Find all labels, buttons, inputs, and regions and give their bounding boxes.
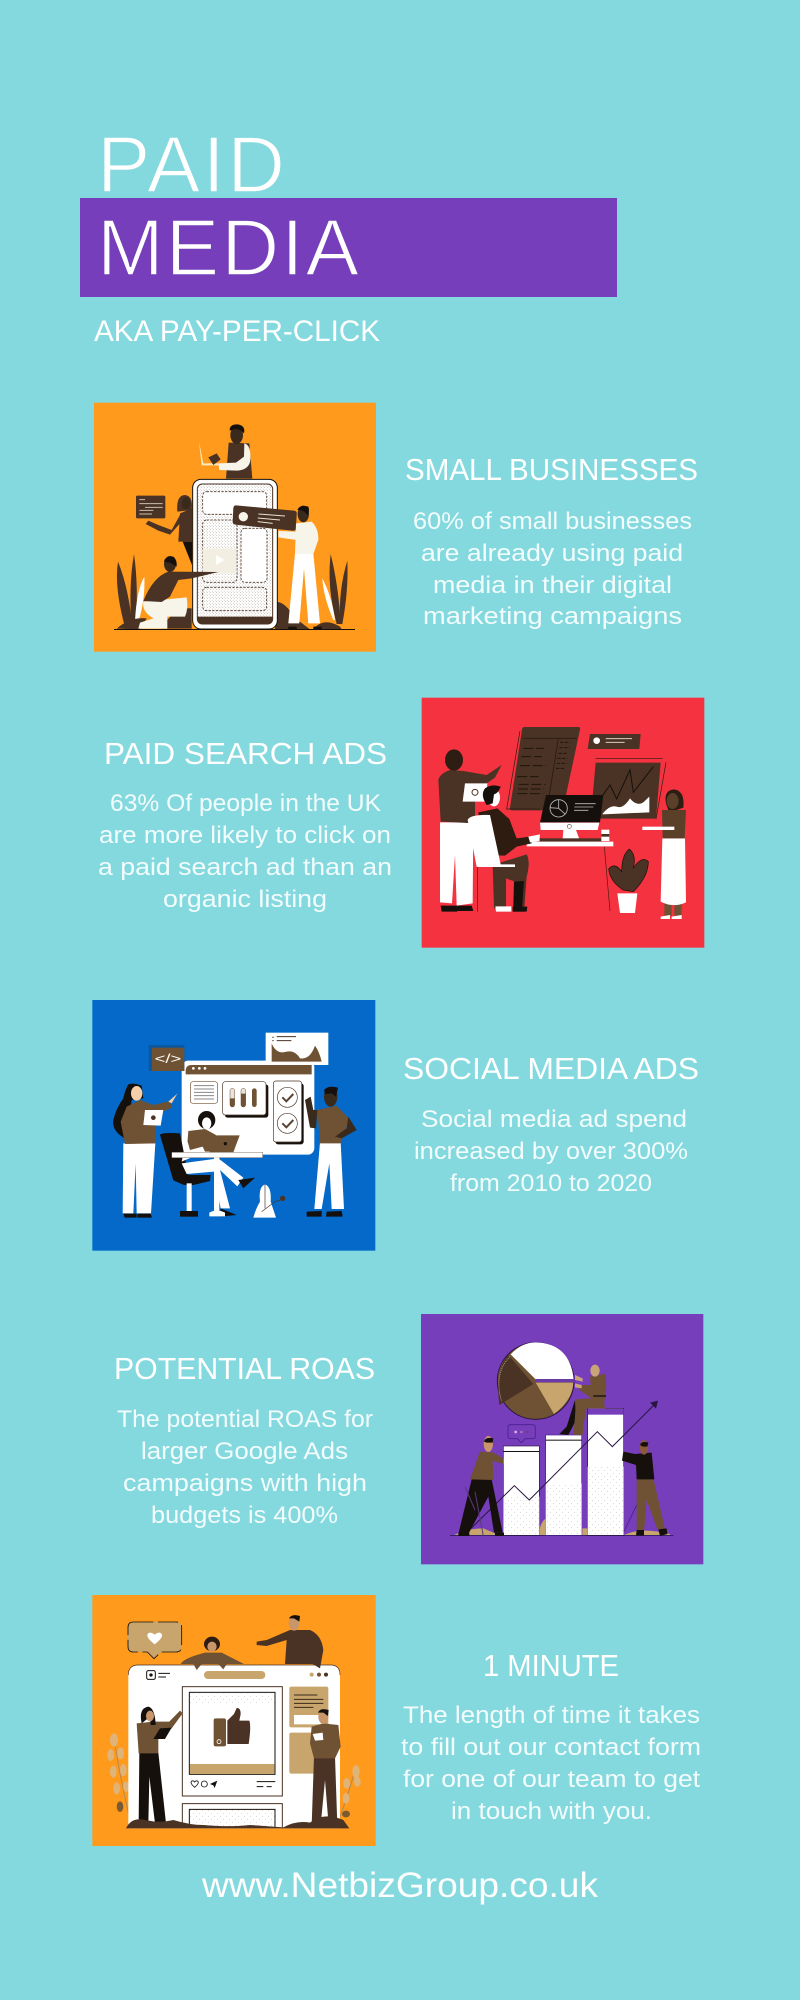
icon: left plants xyxy=(117,554,147,629)
person: man sitting on bar xyxy=(559,1365,606,1435)
body text: a paid search ad than an xyxy=(98,854,392,881)
panel text: social media ads xyxy=(403,1051,699,1197)
person: woman behind phone xyxy=(146,495,192,565)
person: seated woman xyxy=(182,1111,255,1217)
title: paid: PAID xyxy=(97,120,285,209)
body text: organic listing xyxy=(163,886,327,913)
person: woman with clipboard xyxy=(137,1707,183,1828)
icon: right foliage xyxy=(340,1765,361,1817)
chair xyxy=(160,1133,211,1217)
person: top with laptop xyxy=(199,424,252,479)
badge card xyxy=(588,734,641,749)
icon: vase xyxy=(253,1184,285,1218)
heading: PAID SEARCH ADS xyxy=(104,736,387,771)
desk xyxy=(527,830,613,911)
body text: are already using paid xyxy=(421,540,683,567)
laptop and table xyxy=(172,1135,263,1216)
person: seated man xyxy=(478,785,540,912)
panel text: paid search ads xyxy=(98,736,392,913)
person: standing man xyxy=(438,749,502,912)
panel: potential roas illustration xyxy=(421,1314,703,1564)
ground line xyxy=(114,628,355,631)
title bar xyxy=(80,198,617,297)
body text: budgets is 400% xyxy=(151,1502,338,1529)
footer website url: www.NetbizGroup.co.uk xyxy=(201,1866,599,1905)
pie chart xyxy=(497,1342,576,1419)
title: media: MEDIA xyxy=(97,203,360,292)
chair xyxy=(468,815,515,912)
ground xyxy=(450,1518,673,1536)
trend arrow xyxy=(467,1401,658,1533)
big list screen xyxy=(507,727,580,810)
body text: for one of our team to get xyxy=(403,1766,700,1793)
person: man pushing right xyxy=(622,1440,667,1536)
person: kneeling man xyxy=(138,556,218,629)
person: man in white xyxy=(278,506,322,629)
code box xyxy=(149,1045,184,1071)
code box: </> xyxy=(155,1051,182,1066)
person: woman with tablet xyxy=(113,1084,177,1218)
panel: paid search ads illustration xyxy=(422,698,704,948)
heading: SMALL BUSINESSES xyxy=(405,452,698,487)
body text: to fill out our contact form xyxy=(401,1734,701,1761)
chart screen xyxy=(591,758,666,819)
body text xyxy=(414,1106,688,1197)
icon: thumbs up xyxy=(214,1708,250,1746)
body text: 63% Of people in the UK xyxy=(110,790,381,817)
person: man standing right xyxy=(305,1087,357,1217)
panel: one minute illustration xyxy=(92,1595,376,1846)
heading: SOCIAL MEDIA ADS xyxy=(403,1051,699,1086)
body text xyxy=(98,790,392,913)
text card xyxy=(190,1082,218,1103)
person: man pushing left xyxy=(458,1436,504,1536)
person: woman with tray xyxy=(642,789,686,919)
body text: 60% of small businesses xyxy=(413,508,692,535)
checklist card xyxy=(273,1081,304,1144)
body text: in touch with you. xyxy=(451,1798,652,1825)
body text xyxy=(401,1702,701,1825)
panel text: small businesses xyxy=(405,452,698,630)
panel: social media ads illustration xyxy=(92,1000,375,1251)
person: woman over window xyxy=(181,1637,244,1670)
body text: Social media ad spend xyxy=(421,1106,687,1133)
bars xyxy=(503,1408,624,1535)
body text: marketing campaigns xyxy=(423,603,682,630)
body text: increased by over 300% xyxy=(414,1138,688,1165)
panel: small businesses illustration xyxy=(94,403,376,652)
body text xyxy=(117,1406,373,1529)
body text: The length of time it takes xyxy=(403,1702,700,1729)
area chart card xyxy=(266,1033,328,1065)
browser window xyxy=(182,1061,314,1155)
plant xyxy=(609,849,648,913)
body text: media in their digital xyxy=(433,572,672,599)
body text: from 2010 to 2020 xyxy=(450,1170,652,1197)
person: man over window xyxy=(257,1615,323,1668)
subtitle: AKA PAY-PER-CLICK xyxy=(94,315,380,348)
post card xyxy=(182,1687,282,1796)
icon: right plants xyxy=(162,554,348,629)
heading: 1 MINUTE xyxy=(483,1648,619,1683)
body text xyxy=(413,508,692,630)
ground mounds xyxy=(126,1816,349,1828)
body text: larger Google Ads xyxy=(141,1438,348,1465)
icon: left foliage xyxy=(107,1733,129,1817)
side cards xyxy=(289,1687,328,1774)
person: man with tablet xyxy=(310,1709,341,1825)
speech bubble xyxy=(508,1425,535,1443)
panel text: potential roas xyxy=(114,1351,375,1529)
icon: phone xyxy=(193,479,277,629)
monitor xyxy=(540,795,603,839)
second post card xyxy=(182,1804,282,1828)
body text: are more likely to click on xyxy=(99,822,391,849)
heading: POTENTIAL ROAS xyxy=(114,1351,375,1386)
icon: heart bubble xyxy=(128,1622,182,1659)
title block xyxy=(80,120,617,348)
body text: The potential ROAS for xyxy=(117,1406,373,1433)
icon: heart, search and send xyxy=(191,1781,275,1788)
slider card xyxy=(223,1082,268,1118)
browser window xyxy=(128,1665,340,1828)
panel text: one minute xyxy=(401,1648,701,1825)
card held by man xyxy=(233,505,297,531)
body text: campaigns with high xyxy=(123,1470,367,1497)
speech box left xyxy=(136,496,165,518)
